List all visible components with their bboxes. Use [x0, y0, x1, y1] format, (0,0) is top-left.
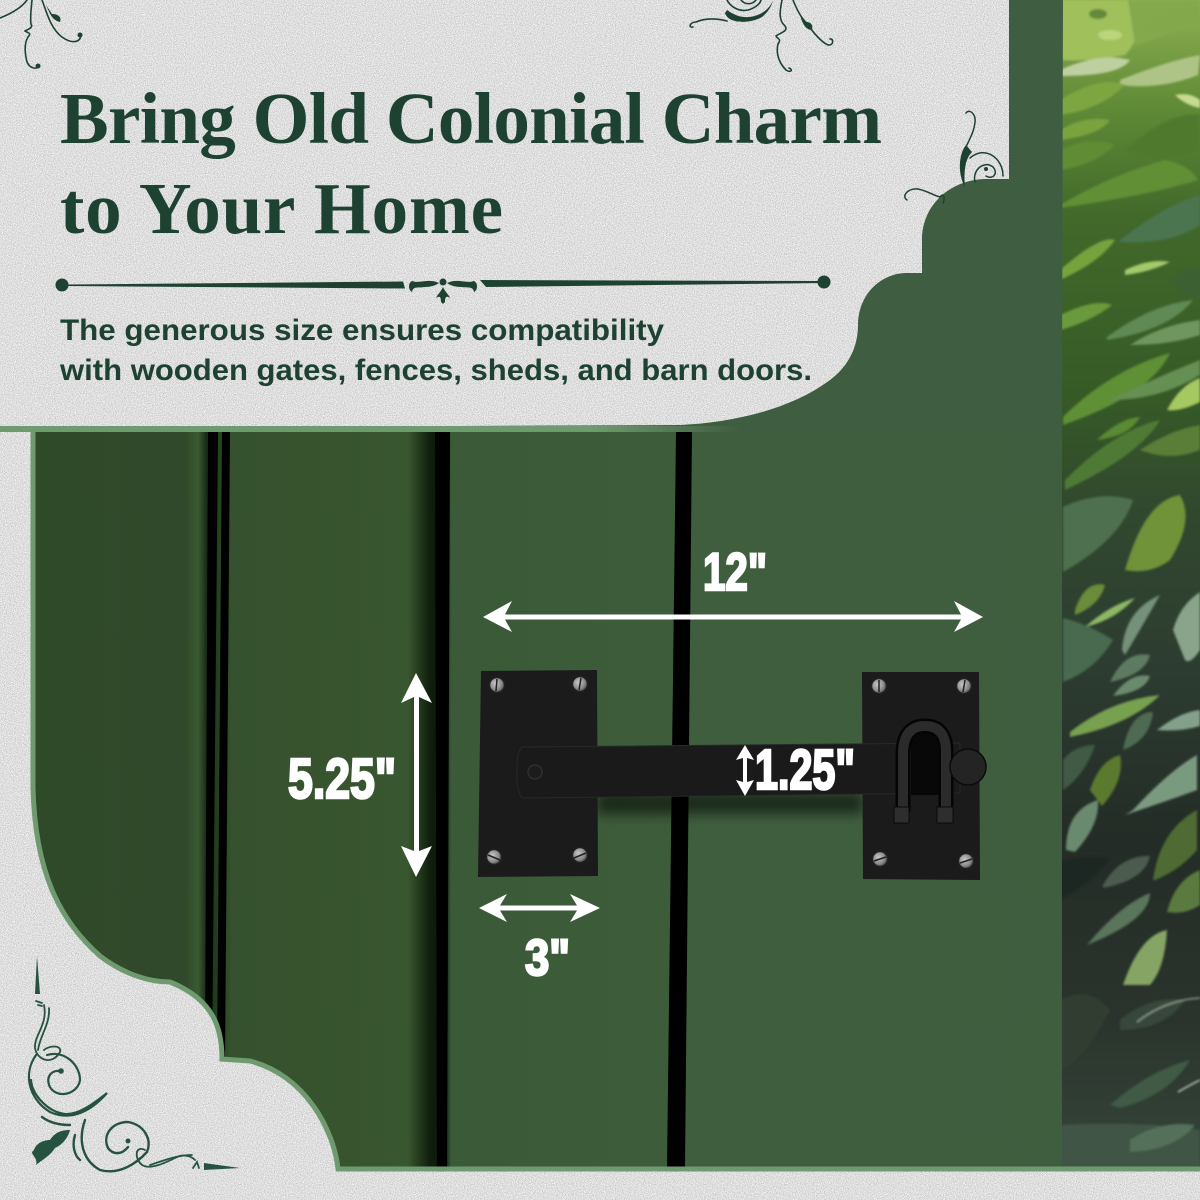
pivot rivet — [528, 765, 542, 779]
dimension: 1.25 inch: 1.25" — [755, 738, 855, 802]
knob — [950, 749, 986, 785]
dimension: 12 inch: 12" — [703, 543, 767, 602]
right mounting plate — [862, 672, 980, 880]
ornament: top-left corner — [0, 0, 82, 68]
dimension: 5.25 inch — [288, 673, 432, 877]
latch bar — [517, 743, 960, 798]
foliage photo — [1050, 0, 1200, 1170]
dimension: 1.25 inch — [736, 738, 855, 802]
ornament: top-center flourish — [690, 0, 833, 71]
ornament: bottom-left corner — [29, 956, 240, 1171]
hardware: latch — [478, 670, 986, 880]
description text: with wooden gates, fences, sheds, and barn doors. — [59, 354, 812, 387]
staple — [894, 726, 953, 823]
paper edge trim — [0, 426, 1200, 1169]
ornament: upper-right corner — [905, 111, 1003, 203]
divider with ornament — [56, 276, 830, 304]
title — [60, 78, 882, 249]
title: to Your Home — [60, 168, 503, 249]
description text: The generous size ensures compatibility — [60, 314, 665, 347]
dimension: 3 inch — [479, 894, 600, 986]
description text — [59, 314, 812, 387]
dimension: 12 inch — [483, 543, 983, 632]
left mounting plate — [478, 670, 598, 877]
dimension: 3 inch: 3" — [525, 929, 570, 986]
title: Bring Old Colonial Charm — [60, 78, 882, 159]
latch shadow — [597, 792, 863, 814]
dimension: 5.25 inch: 5.25" — [288, 747, 396, 811]
